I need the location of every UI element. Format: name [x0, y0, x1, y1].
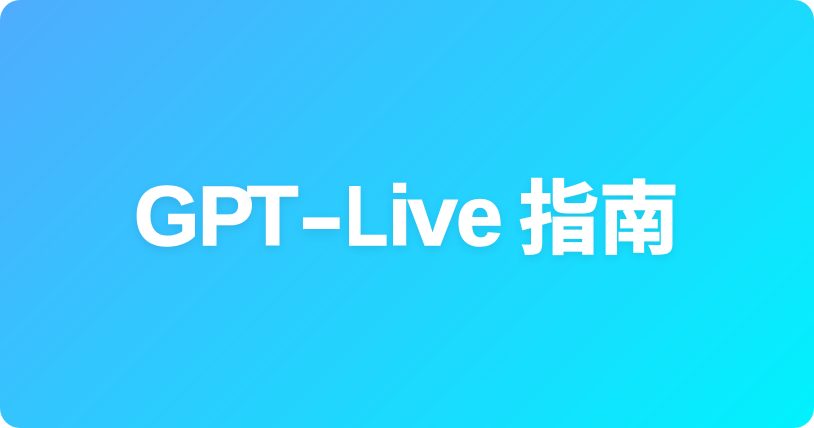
title: GPT-Live guide: i — [388, 169, 411, 263]
title: GPT-Live guide: 指南 — [519, 175, 679, 264]
title: GPT-Live guide: e — [456, 169, 503, 263]
title: GPT-Live guide: v — [408, 169, 458, 263]
title: GPT-Live guide: G — [134, 169, 199, 263]
title: GPT-Live guide: T — [247, 169, 298, 263]
title: GPT-Live guide: P — [198, 169, 254, 263]
title: GPT-Live guide: - — [299, 169, 344, 263]
title: GPT-Live guide: L — [345, 169, 388, 263]
